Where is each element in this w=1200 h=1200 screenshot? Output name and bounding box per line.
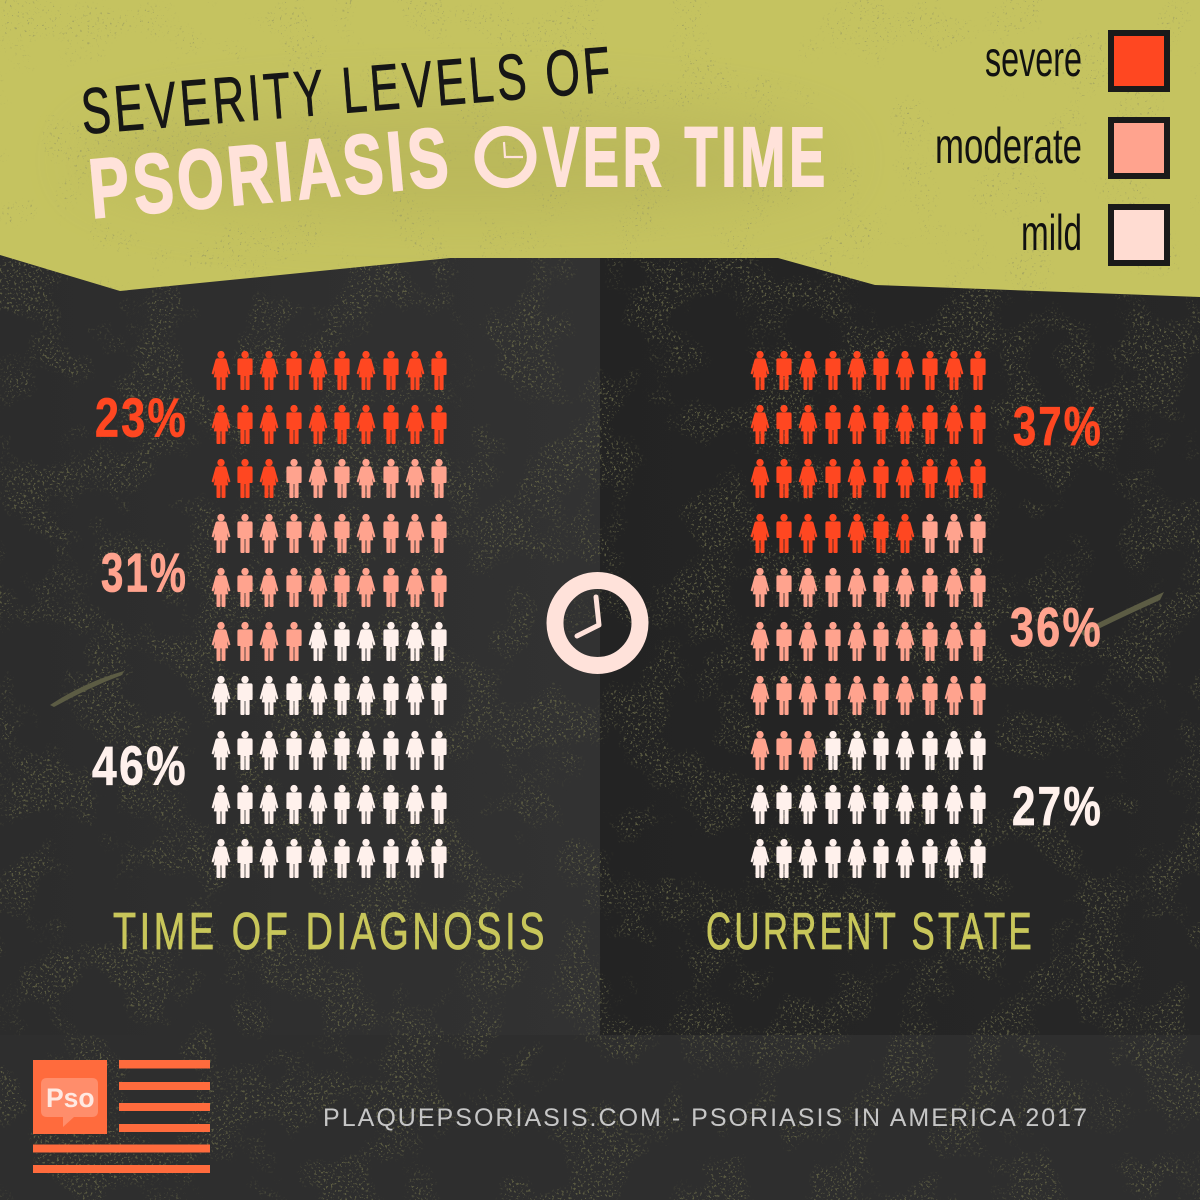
pictogram: current 100 people (751, 351, 986, 878)
title line 2: psoriasis: PSORIASIS (85, 109, 456, 236)
stat: 46%: 46% (92, 734, 188, 796)
legend: mild (1021, 205, 1167, 263)
icon: center clock (555, 580, 640, 666)
severe 23 people (212, 351, 447, 498)
panel: time of diagnosis (92, 351, 548, 961)
footer (33, 1060, 1087, 1173)
stat: 37%: 37% (1013, 395, 1103, 457)
legend: mild: mild (1021, 205, 1082, 261)
legend (935, 31, 1167, 263)
title (78, 32, 829, 236)
mild 27 people (751, 731, 986, 878)
legend: severe: severe (985, 31, 1082, 87)
mild 46 people (212, 622, 447, 878)
title line 2: over time: VER TIME (543, 110, 829, 204)
heading: current state: CURRENT STATE (706, 903, 1035, 961)
background: dark panels (0, 240, 1200, 1200)
icon: title clock (479, 131, 532, 183)
stat: 36%: 36% (1010, 596, 1103, 658)
legend: moderate: moderate (935, 118, 1082, 174)
title line 1: SEVERITY LEVELS OF (78, 32, 616, 148)
stat: 27%: 27% (1012, 775, 1103, 837)
stat: 23%: 23% (95, 386, 188, 448)
moderate 36 people (751, 514, 986, 770)
severe 37 people (751, 351, 986, 553)
moderate 31 people (212, 459, 447, 661)
logo: Pso flag: Pso (46, 1083, 95, 1113)
pictogram: diagnosis 100 people (212, 351, 447, 878)
stat: 31%: 31% (101, 542, 188, 604)
source line: PLAQUEPSORIASIS.COM - PSORIASIS IN AMERICA 2017 (323, 1104, 1087, 1132)
panel: current state (706, 351, 1103, 961)
header band (0, 0, 1200, 300)
logo: Pso flag (33, 1060, 210, 1173)
heading: time of diagnosis: TIME OF DIAGNOSIS (113, 903, 548, 961)
